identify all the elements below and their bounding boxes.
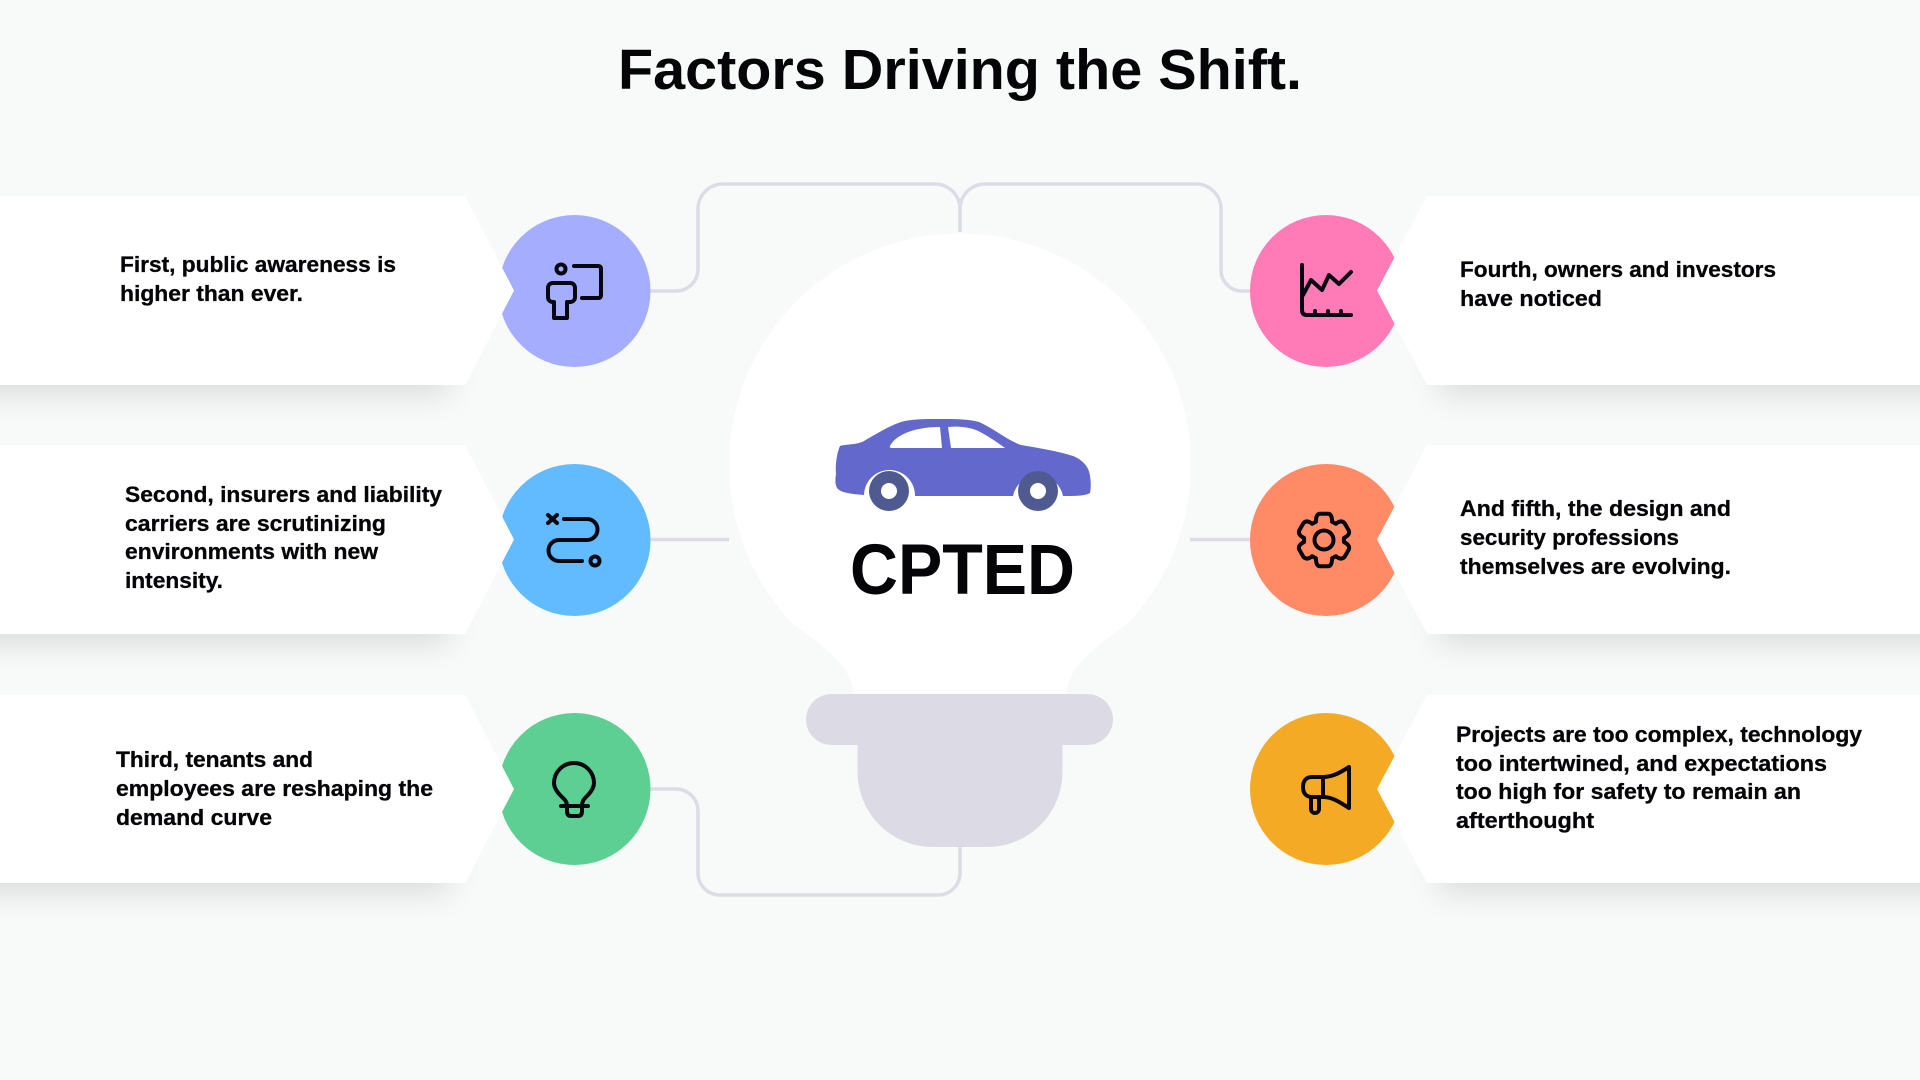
text block <box>125 482 443 593</box>
text block: have noticed <box>1460 286 1602 311</box>
badge: chart <box>1250 215 1402 367</box>
icon: car <box>835 419 1091 511</box>
text block: Third, tenants and <box>116 747 313 772</box>
panel shadow <box>1438 848 1920 892</box>
panel: first <box>0 196 650 394</box>
text block: higher than ever. <box>120 281 303 306</box>
icon: light bulb <box>554 763 594 816</box>
text block: environments with new <box>125 539 379 564</box>
badge: megaphone <box>1250 713 1402 865</box>
text block <box>1456 722 1863 833</box>
panel card <box>0 445 514 634</box>
text block <box>1460 257 1776 311</box>
text block: carriers are scrutinizing <box>125 511 386 536</box>
icon: gear <box>1299 514 1349 566</box>
panel: fourth <box>1250 196 1920 394</box>
text block: And fifth, the design and <box>1460 496 1731 521</box>
badge: presenter <box>498 215 650 367</box>
text block: too intertwined, and expectations <box>1456 751 1827 776</box>
text block: employees are reshaping the <box>116 776 433 801</box>
panel: second <box>0 445 650 643</box>
title: Factors Driving the Shift. <box>618 38 1302 102</box>
panel: third <box>0 695 650 892</box>
panel shadow <box>0 599 450 643</box>
icon: route <box>548 515 600 566</box>
panel shadow <box>0 848 450 892</box>
text block <box>120 252 396 306</box>
icon: line chart <box>1302 265 1351 315</box>
bulb glass <box>729 234 1191 696</box>
text block: Second, insurers and liability <box>125 482 443 507</box>
icon: presenter <box>548 264 601 318</box>
badge: light bulb <box>498 713 650 865</box>
panel: fifth <box>1250 445 1920 643</box>
icon: megaphone <box>1303 767 1349 813</box>
text block: afterthought <box>1456 808 1595 833</box>
text block: First, public awareness is <box>120 252 396 277</box>
panel: sixth <box>1250 695 1920 892</box>
badge: route <box>498 464 650 616</box>
text block: too high for safety to remain an <box>1456 779 1801 804</box>
panel shadow <box>1438 350 1920 394</box>
bulb base <box>806 694 1113 847</box>
text block <box>116 747 433 830</box>
text block: security professions <box>1460 525 1679 550</box>
text block: intensity. <box>125 568 223 593</box>
badge: gear <box>1250 464 1402 616</box>
connector lines <box>650 184 1250 895</box>
panel card <box>0 196 514 385</box>
text block: demand curve <box>116 805 272 830</box>
panel shadow <box>0 350 450 394</box>
text block: Fourth, owners and investors <box>1460 257 1776 282</box>
panel shadow <box>1438 599 1920 643</box>
panel card <box>1377 695 1920 883</box>
panel card <box>1377 196 1920 385</box>
central light bulb <box>729 234 1191 847</box>
panel card <box>1377 445 1920 634</box>
text block <box>1460 496 1731 579</box>
text block: themselves are evolving. <box>1460 554 1731 579</box>
text block: Projects are too complex, technology <box>1456 722 1863 747</box>
center label: CPTED <box>850 531 1075 610</box>
panel card <box>0 695 514 883</box>
